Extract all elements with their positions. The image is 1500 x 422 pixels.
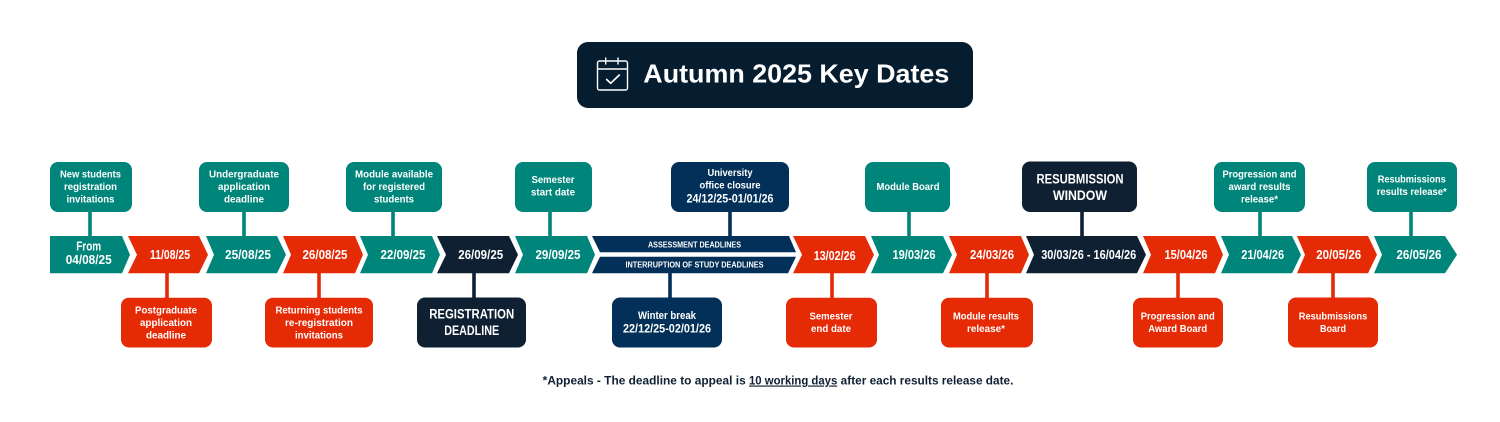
chevron: 13/02/26 <box>793 236 874 273</box>
callout: semester start date: Semester <box>532 174 574 186</box>
callout: resubmissions board: Resubmissions <box>1299 311 1367 323</box>
chevron: 26/09/25 <box>437 236 518 273</box>
chevron: 15/04/26 <box>1143 236 1223 273</box>
chevron: 11/08/25 <box>128 236 208 273</box>
callout: postgraduate application deadline: application <box>140 317 192 329</box>
chevron: 21/04/26: 21/04/26 <box>1241 248 1284 262</box>
callout: semester start date: start date <box>531 187 575 199</box>
chevron: 19/03/26: 19/03/26 <box>892 248 936 262</box>
chevron: 26/09/25: 26/09/25 <box>458 248 503 262</box>
callout: postgraduate application deadline: deadline <box>146 330 186 342</box>
chevron: 19/03/26 <box>871 236 952 273</box>
callout: progression and award results release: award results <box>1228 181 1291 193</box>
chevron: 30/03/26 - 16/04/26 <box>1026 236 1146 273</box>
chevron: 21/04/26 <box>1221 236 1301 273</box>
callout: module results release: Module results <box>953 311 1019 323</box>
callout: resubmissions results release: results release* <box>1377 186 1448 198</box>
chevron: 26/05/26: 26/05/26 <box>1396 248 1442 262</box>
callout: resubmissions board <box>1288 273 1378 348</box>
callout: semester start date <box>515 162 592 237</box>
chevron: 20/05/26 <box>1297 236 1377 273</box>
callout: module available: for registered <box>363 181 425 193</box>
callout: winter break: Winter break <box>638 310 697 322</box>
chevron: 20/05/26: 20/05/26 <box>1316 248 1361 262</box>
callout: winter break: 22/12/25-02/01/26 <box>623 324 711 336</box>
chevron: 30/03/26 - 16/04/26: 30/03/26 - 16/04/26 <box>1041 248 1136 262</box>
callout: resubmission window: WINDOW <box>1053 188 1107 203</box>
chevron: 22/09/25: 22/09/25 <box>380 248 426 262</box>
chevron: 29/09/25: 29/09/25 <box>536 248 581 262</box>
callout: resubmission window: RESUBMISSION <box>1036 172 1124 187</box>
callout: undergraduate application deadline <box>199 162 289 237</box>
callout: registration deadline <box>417 273 526 348</box>
callout: winter break <box>612 273 722 348</box>
band: assessment deadlines: ASSESSMENT DEADLINES <box>648 240 742 249</box>
chevron: 29/09/25 <box>515 236 595 273</box>
callout: undergraduate application deadline: deadline <box>224 194 264 206</box>
band: interruption of study deadlines: INTERRUPTION OF STUDY DEADLINES <box>626 261 764 270</box>
title text: Autumn 2025 Key Dates <box>643 58 949 88</box>
chevron: 11/08/25: 11/08/25 <box>150 248 190 262</box>
callout: progression and award board: Award Board <box>1148 323 1207 335</box>
chevron: 25/08/25: 25/08/25 <box>225 248 271 262</box>
chevron: 24/03/26: 24/03/26 <box>970 248 1014 262</box>
callout: resubmissions board: Board <box>1320 323 1346 335</box>
callout: postgraduate application deadline: Postgraduate <box>135 305 197 317</box>
callout: returning students re-registration invitations <box>265 273 373 348</box>
callout: semester end date: end date <box>811 323 851 335</box>
callout: returning students re-registration invitations: invitations <box>295 330 343 342</box>
callout: returning students re-registration invitations: re-registration <box>285 317 353 329</box>
callout: new students registration invitations: invitations <box>66 194 115 206</box>
callout: progression and award board <box>1133 273 1223 348</box>
icon: calendar with check <box>598 58 628 90</box>
footnote: appeals deadline: 10 working days <box>749 376 837 388</box>
footnote: appeals deadline: *Appeals - The deadline to appeal is <box>543 376 746 388</box>
callout: progression and award results release <box>1214 162 1305 237</box>
timeline <box>50 236 1457 273</box>
footnote: appeals deadline <box>543 376 1013 388</box>
callout: postgraduate application deadline <box>121 273 212 348</box>
callout: resubmission window <box>1022 162 1137 237</box>
callout: progression and award results release: Progression and <box>1222 169 1296 181</box>
callout: returning students re-registration invitations: Returning students <box>276 305 363 317</box>
callout: semester end date: Semester <box>810 311 852 323</box>
callout: module available <box>346 162 442 237</box>
callout: new students registration invitations: New students <box>60 169 121 181</box>
band: assessment deadlines <box>592 236 796 252</box>
callout: module available: Module available <box>355 169 433 181</box>
callout: university office closure <box>671 162 789 237</box>
chevron: 13/02/26: 13/02/26 <box>814 249 856 263</box>
callout: registration deadline: REGISTRATION <box>429 307 514 322</box>
band: interruption of study deadlines <box>592 257 796 273</box>
chevron: From 04/08/25 <box>50 236 130 273</box>
callout: module results release <box>941 273 1033 348</box>
title banner <box>577 42 973 108</box>
footnote: appeals deadline: after each results release date. <box>841 376 1013 388</box>
chevron: From 04/08/25: From <box>76 240 101 254</box>
chevron: 15/04/26: 15/04/26 <box>1164 248 1208 262</box>
callout: module board: Module Board <box>876 181 940 193</box>
callout: resubmissions results release <box>1367 162 1457 237</box>
callout: new students registration invitations: registration <box>64 181 117 193</box>
callout: progression and award board: Progression and <box>1141 311 1215 323</box>
callout: resubmissions results release: Resubmissions <box>1378 174 1446 186</box>
chevron: 26/08/25 <box>283 236 363 273</box>
callout: new students registration invitations <box>50 162 132 237</box>
chevron: 24/03/26 <box>949 236 1029 273</box>
chevron: 25/08/25 <box>206 236 286 273</box>
callout: undergraduate application deadline: Undergraduate <box>209 169 279 181</box>
chevron: 26/08/25: 26/08/25 <box>302 248 348 262</box>
chevron: 26/05/26 <box>1374 236 1457 273</box>
chevron: From 04/08/25: 04/08/25 <box>66 253 112 267</box>
callout: module board <box>865 162 950 237</box>
callout: module available: students <box>374 194 414 206</box>
callout: module results release: release* <box>967 323 1006 335</box>
callout: university office closure: office closure <box>700 180 761 192</box>
callout: progression and award results release: release* <box>1241 194 1279 206</box>
chevron: 22/09/25 <box>360 236 440 273</box>
callout: university office closure: 24/12/25-01/01/26 <box>686 194 774 206</box>
callout: semester end date <box>786 273 877 348</box>
callout: university office closure: University <box>708 167 753 179</box>
callout: registration deadline: DEADLINE <box>444 323 499 338</box>
callout: undergraduate application deadline: application <box>218 181 270 193</box>
